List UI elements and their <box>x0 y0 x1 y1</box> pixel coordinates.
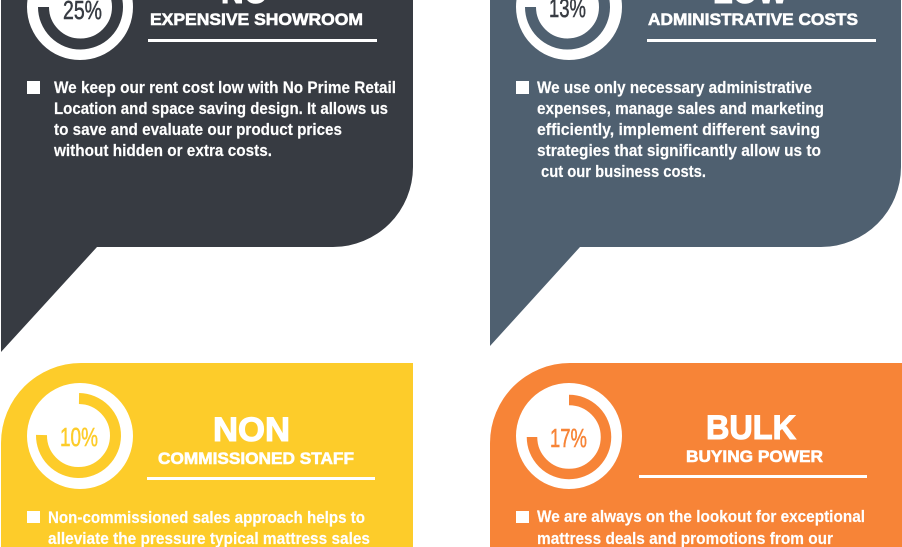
body text: expenses, manage sales and marketing <box>537 100 824 118</box>
panel: no expensive showroom <box>1 0 413 352</box>
heading: non commissioned staff <box>147 411 375 480</box>
body text: cut our business costs. <box>541 163 706 181</box>
panel: low administrative costs <box>490 0 901 346</box>
bullet <box>27 81 40 94</box>
body text: Non-commissioned sales approach helps to <box>48 509 365 527</box>
progress ring: 10%: 10% <box>60 422 98 452</box>
body text: We keep our rent cost low with No Prime Retail <box>54 79 396 97</box>
heading: bulk buying power <box>639 409 867 478</box>
progress ring: 25% <box>27 0 133 60</box>
progress ring: 17% <box>516 383 622 489</box>
body text <box>537 79 824 181</box>
card background: orange <box>490 363 902 547</box>
heading: non commissioned staff: NON <box>213 411 290 449</box>
body text: efficiently, implement different saving <box>537 121 820 139</box>
bullet <box>27 511 40 523</box>
heading: no expensive showroom: EXPENSIVE SHOWROOM <box>150 10 363 29</box>
speech bubble background: slate <box>490 0 901 346</box>
heading: bulk buying power: BUYING POWER <box>686 447 823 466</box>
body text <box>537 508 865 547</box>
heading: low administrative costs <box>647 0 876 42</box>
card background: yellow <box>1 363 413 547</box>
progress ring: 13% <box>516 0 622 60</box>
body text <box>53 79 396 160</box>
heading: bulk buying power: BULK <box>706 409 796 447</box>
progress ring: 17%: 17% <box>550 423 587 453</box>
body text: We are always on the lookout for exceptional <box>537 508 865 526</box>
heading: non commissioned staff: COMMISSIONED STAFF <box>158 449 354 468</box>
heading: no expensive showroom <box>148 0 377 42</box>
bullet <box>516 81 529 94</box>
body text: strategies that significantly allow us to <box>537 142 821 160</box>
panel: bulk buying power <box>490 363 902 547</box>
speech bubble background: dark <box>1 0 413 352</box>
heading: low administrative costs: ADMINISTRATIVE COSTS <box>648 10 858 29</box>
body text: Location and space saving design. It allows us <box>54 100 388 118</box>
bullet <box>516 511 529 523</box>
body text: to save and evaluate our product prices <box>54 121 342 139</box>
body text: without hidden or extra costs. <box>53 142 272 160</box>
progress ring: 10% <box>27 383 133 489</box>
body text <box>48 509 370 547</box>
panel: non commissioned staff <box>1 363 413 547</box>
body text: We use only necessary administrative <box>537 79 812 97</box>
